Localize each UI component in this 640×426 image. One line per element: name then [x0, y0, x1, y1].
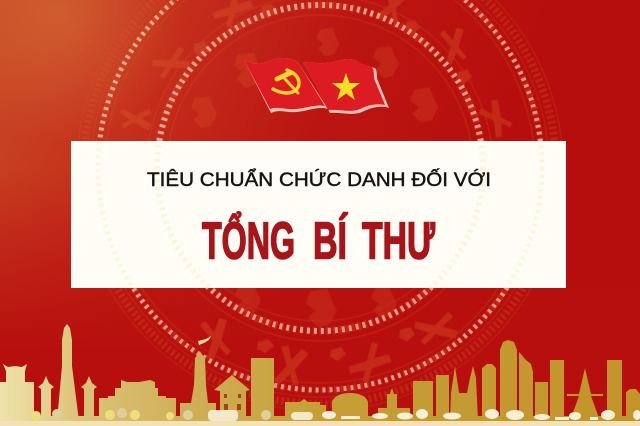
pagoda windows	[224, 394, 241, 410]
dome hall	[332, 393, 368, 421]
pale palace	[0, 364, 34, 421]
faint drum pattern inside panel	[98, 0, 542, 390]
drum motifs: small blobs	[194, 4, 472, 361]
subtitle: TIÊU CHUẨN CHỨC DANH ĐỐI VỚI	[147, 169, 491, 191]
downtown	[413, 381, 433, 421]
city skyline	[0, 324, 640, 426]
street trees and vehicles	[31, 408, 640, 421]
tall tower	[378, 388, 410, 421]
party and national flags	[244, 58, 389, 114]
flag atop monument	[198, 336, 211, 345]
monument tower	[180, 352, 216, 421]
bronze drum pattern	[77, 0, 563, 411]
icon: star	[332, 73, 360, 100]
drum motifs: birds	[116, 0, 519, 390]
icon: hammer and sickle	[273, 70, 299, 93]
main title: THƯ	[362, 212, 436, 270]
landmarks	[0, 324, 640, 421]
title panel	[71, 0, 566, 390]
main title: TỔNG	[202, 212, 295, 270]
small towers	[38, 376, 54, 421]
flag: yellow star	[303, 59, 389, 114]
main title	[202, 212, 436, 270]
main title: BÍ	[313, 212, 348, 270]
ground strip	[0, 421, 640, 426]
flag: hammer and sickle	[244, 58, 328, 113]
golden citadel	[99, 380, 176, 421]
pagoda	[214, 375, 250, 421]
drum motifs: inner figures	[191, 28, 438, 327]
